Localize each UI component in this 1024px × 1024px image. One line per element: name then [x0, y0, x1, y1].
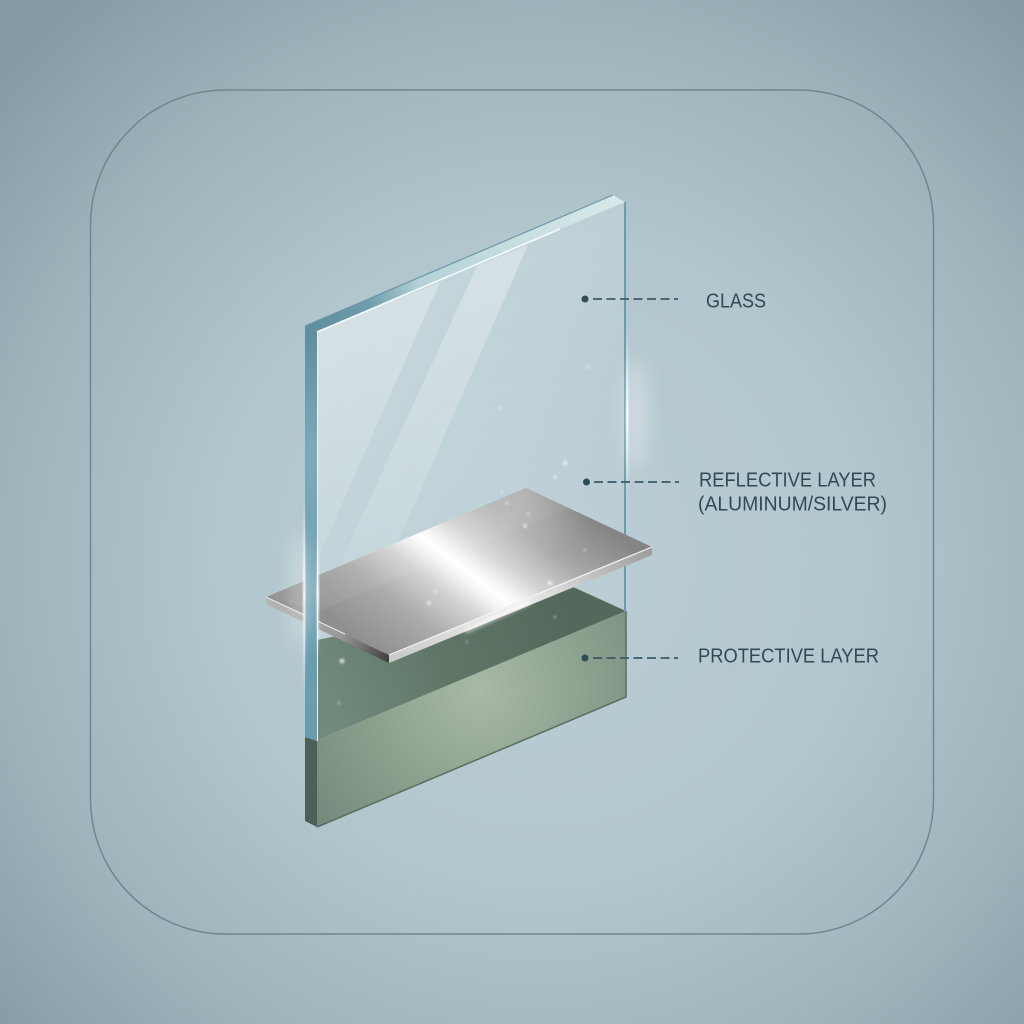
label: reflective layer — [583, 470, 887, 516]
label: reflective layer: (ALUMINUM/SILVER) — [698, 494, 887, 516]
left glint — [293, 500, 319, 690]
protective layer top face — [317, 587, 626, 740]
protective layer bottom edge — [317, 611, 626, 827]
label: glass: GLASS — [706, 290, 766, 312]
reflective plate — [266, 488, 652, 663]
plate right edge — [389, 547, 652, 663]
glass reflection bands — [305, 245, 528, 640]
right glint — [626, 330, 645, 500]
plate edge highlights — [266, 547, 652, 655]
plate under-edge glow — [465, 602, 530, 631]
plate left edge — [266, 597, 389, 663]
protective layer side edge — [305, 737, 317, 827]
plate top corner light — [266, 488, 652, 655]
left inner highlight — [316, 332, 318, 741]
mirror illustration — [266, 195, 652, 827]
glass pane face — [317, 202, 625, 740]
sparkle particles — [337, 365, 590, 705]
label: protective layer — [582, 646, 879, 668]
glass right edge — [624, 202, 626, 612]
glass left edge — [305, 326, 317, 741]
rounded frame — [90, 90, 934, 934]
top back edge line — [305, 195, 613, 326]
protective layer front face — [317, 611, 626, 827]
glass top edge — [305, 195, 625, 332]
top edge highlight — [317, 229, 560, 332]
plate upper tint — [266, 488, 567, 611]
plate top surface — [266, 488, 652, 655]
label: protective layer: PROTECTIVE LAYER — [698, 646, 879, 668]
label: glass — [582, 290, 766, 312]
label: reflective layer: REFLECTIVE LAYER — [699, 470, 876, 492]
